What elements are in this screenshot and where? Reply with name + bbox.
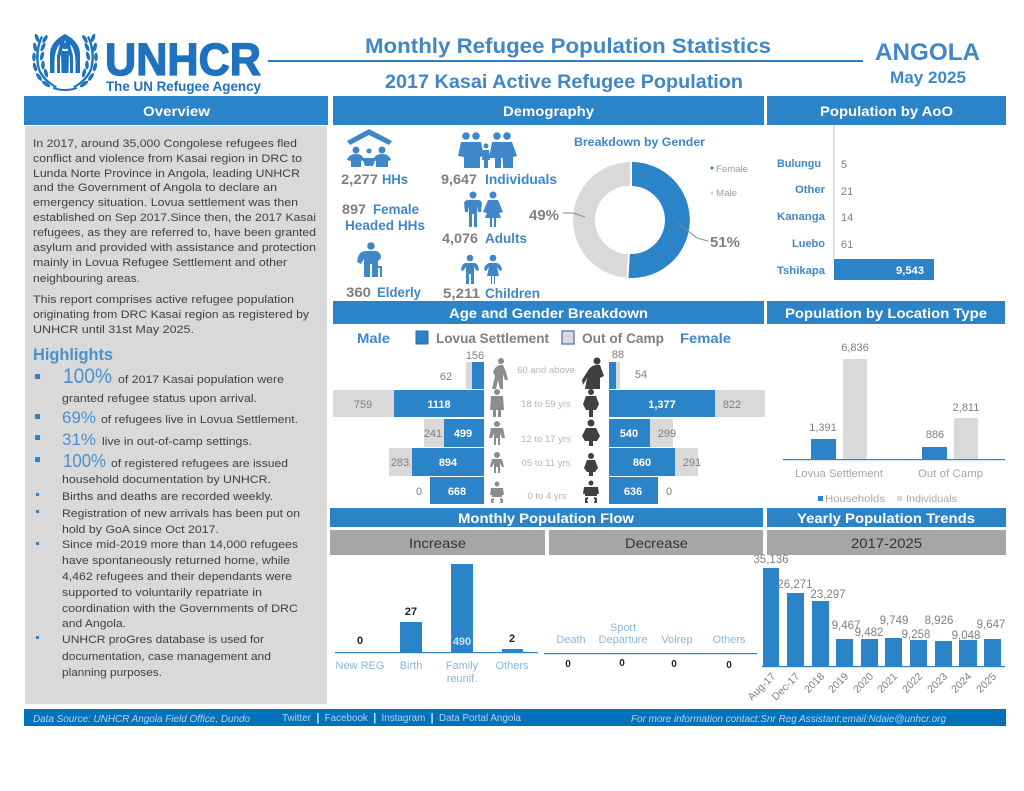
population pyramid: 12 to 17 yrs bbox=[521, 434, 571, 445]
report scope paragraph: UNHCR until 31st May 2025. bbox=[33, 324, 194, 336]
highlights list: supported to voluntarily repatriate in bbox=[62, 587, 262, 599]
elderly stat: 360 bbox=[346, 284, 371, 300]
panel: population by location type bbox=[767, 301, 1005, 505]
overview heading bbox=[24, 96, 328, 125]
subtitle: 2017 Kasai Active Refugee Population bbox=[385, 72, 743, 93]
AoO bar chart bbox=[777, 158, 934, 280]
population pyramid: 860 bbox=[633, 457, 651, 469]
donut segment: male bbox=[573, 162, 630, 278]
header bbox=[32, 33, 980, 94]
contact: For more information contact:Snr Reg Assistant;email:Ndaie@unhcr.org bbox=[631, 713, 946, 725]
yearly trends heading: Yearly Population Trends bbox=[797, 510, 975, 526]
location type bar chart: 1,391 bbox=[809, 422, 837, 434]
panel: demography bbox=[333, 96, 764, 301]
yearly bar chart bbox=[746, 554, 1005, 703]
panel: overview bbox=[24, 96, 328, 704]
female headed households stat: Headed HHs bbox=[345, 217, 425, 233]
icons: female age groups bbox=[582, 358, 604, 503]
population pyramid: 499 bbox=[454, 428, 472, 440]
location type bar chart: 6,836 bbox=[841, 342, 869, 354]
decrease bar chart: Death bbox=[556, 634, 586, 646]
children stat: Children bbox=[485, 285, 540, 301]
population pyramid: 156 bbox=[466, 350, 484, 362]
population pyramid: 62 bbox=[440, 371, 452, 383]
increase bar chart: 2 bbox=[509, 633, 515, 645]
population pyramid: 241 bbox=[424, 428, 442, 440]
yearly bar chart: 9,482 bbox=[855, 627, 883, 639]
age chart legend: Lovua Settlement bbox=[436, 330, 549, 346]
AoO bar chart: Bulungu bbox=[777, 158, 821, 170]
decrease bar chart: 0 bbox=[671, 659, 677, 670]
highlights list: 100% bbox=[63, 451, 106, 471]
AoO heading bbox=[767, 96, 1006, 125]
decrease sub-heading: Decrease bbox=[625, 535, 688, 551]
panel: population by AoO bbox=[767, 96, 1006, 280]
individuals stat: Individuals bbox=[485, 171, 557, 187]
icon: adults bbox=[464, 192, 503, 227]
social links: Twitter ❙ Facebook ❙ Instagram ❙ Data Portal Angola bbox=[282, 712, 521, 724]
increase bar chart: 27 bbox=[405, 606, 417, 618]
population pyramid: 18 to 59 yrs bbox=[521, 399, 571, 410]
households stat bbox=[341, 171, 408, 187]
highlights list: 4,462 refugees and their dependants were bbox=[62, 571, 292, 583]
highlights list: have spontaneously returned home, while bbox=[62, 555, 290, 567]
yearly bar chart: 9,647 bbox=[977, 619, 1005, 631]
increase sub-heading: Increase bbox=[409, 535, 466, 551]
yearly bar chart: 23,297 bbox=[810, 589, 846, 601]
highlights list: 31% bbox=[62, 430, 96, 449]
adults stat: Adults bbox=[485, 230, 527, 246]
yearly bar chart: Dec-17 bbox=[770, 671, 802, 703]
label: female share: 51% bbox=[710, 234, 740, 251]
AoO bar chart: 21 bbox=[841, 186, 853, 198]
population pyramid: 88 bbox=[612, 349, 624, 361]
highlights list: Since mid-2019 more than 14,000 refugees bbox=[62, 539, 299, 551]
AoO bar chart: Tshikapa bbox=[777, 265, 826, 277]
demography heading bbox=[333, 96, 764, 125]
population pyramid: 822 bbox=[723, 399, 741, 411]
yearly bar chart: 2023 bbox=[925, 671, 950, 696]
footer bbox=[24, 709, 1006, 726]
monthly flow heading bbox=[330, 508, 763, 527]
age and gender heading bbox=[333, 301, 764, 324]
overview paragraph: Lunda Norte Province in Angola, leading UNHCR bbox=[33, 168, 300, 180]
highlights list: 100% bbox=[63, 365, 112, 388]
increase bar chart: reunif. bbox=[447, 673, 477, 685]
population pyramid: 0 bbox=[416, 486, 422, 498]
age chart legend: Out of Camp bbox=[582, 330, 664, 346]
decrease bar chart: 0 bbox=[619, 658, 625, 669]
yearly bar chart: 9,048 bbox=[952, 630, 980, 642]
year range sub-heading: 2017-2025 bbox=[851, 535, 922, 551]
location chart legend bbox=[818, 493, 957, 505]
country: ANGOLA bbox=[875, 39, 980, 66]
yearly bar chart: 2021 bbox=[875, 671, 900, 696]
overview paragraph: asylum and provided with assistance and protection bbox=[33, 242, 316, 254]
location type bar chart: Lovua Settlement bbox=[795, 468, 883, 480]
AoO bar chart: 14 bbox=[841, 212, 853, 224]
population pyramid: 894 bbox=[439, 457, 458, 469]
logo wordmark: UNHCR bbox=[105, 34, 261, 85]
location chart legend: Households bbox=[825, 493, 885, 505]
increase sub-heading bbox=[330, 530, 545, 555]
panel: age and gender breakdown bbox=[333, 301, 765, 504]
elderly stat: Elderly bbox=[377, 284, 421, 300]
yearly bar chart: 9,749 bbox=[880, 615, 908, 627]
decrease bar chart: Sport bbox=[610, 622, 636, 634]
decrease sub-heading bbox=[549, 530, 763, 555]
AoO bar chart: 5 bbox=[841, 159, 847, 171]
population pyramid: 0 to 4 yrs bbox=[527, 491, 567, 502]
population pyramid: 1,377 bbox=[648, 399, 676, 411]
yearly bar chart: 8,926 bbox=[925, 615, 953, 627]
icon: family group bbox=[458, 132, 517, 168]
overview paragraph: established on Sep 2017.Since then, the 2017 Kasai bbox=[33, 212, 316, 224]
legend: male: Male bbox=[716, 188, 737, 199]
population pyramid: 1118 bbox=[427, 399, 451, 411]
legend: female: Female bbox=[716, 164, 748, 175]
increase bar chart: Family bbox=[446, 660, 479, 672]
households stat: 2,277 bbox=[341, 171, 378, 187]
children stat: 5,211 bbox=[443, 285, 480, 301]
overview paragraph: mainly in Lovua Refugee Settlement and other bbox=[33, 257, 287, 269]
population pyramid: 299 bbox=[658, 428, 676, 440]
population pyramid bbox=[333, 349, 765, 504]
decrease bar chart: Departure bbox=[599, 634, 647, 646]
report scope paragraph bbox=[33, 294, 310, 336]
location chart legend: Individuals bbox=[906, 493, 957, 505]
data source: Data Source: UNHCR Angola Field Office, Dundo bbox=[33, 713, 250, 725]
AoO bar chart: Kananga bbox=[777, 211, 826, 223]
yearly bar chart: 2022 bbox=[900, 671, 925, 696]
highlights list: and Angola. bbox=[62, 618, 126, 630]
donut chart title: Breakdown by Gender bbox=[574, 135, 705, 149]
yearly bar chart: 2020 bbox=[851, 671, 876, 696]
location type bar chart: 2,811 bbox=[953, 402, 979, 414]
label: female share bbox=[678, 223, 740, 251]
highlights list: UNHCR proGres database is used for bbox=[62, 634, 264, 646]
monthly flow heading: Monthly Population Flow bbox=[458, 510, 634, 526]
location type heading: Population by Location Type bbox=[785, 305, 987, 321]
population pyramid: 540 bbox=[620, 428, 638, 440]
label: male share: 49% bbox=[529, 207, 559, 224]
icon: children bbox=[461, 255, 502, 284]
demography heading: Demography bbox=[503, 103, 594, 119]
population pyramid: 60 and above bbox=[517, 365, 575, 376]
highlights list: Births and deaths are recorded weekly. bbox=[62, 491, 273, 503]
yearly bar chart: Aug-17 bbox=[746, 671, 778, 703]
highlights list: planning purposes. bbox=[62, 667, 162, 679]
icon: UNHCR emblem bbox=[32, 33, 98, 91]
female headed households stat bbox=[342, 201, 425, 233]
increase bar chart: 0 bbox=[357, 635, 363, 647]
icon: household shelter bbox=[347, 129, 392, 167]
highlights list: of refugees live in Lovua Settlement. bbox=[101, 414, 298, 426]
increase bar chart bbox=[335, 564, 538, 685]
highlights list: hold by GoA since Oct 2017. bbox=[62, 524, 219, 536]
location type bar chart bbox=[783, 342, 1005, 480]
highlights list: of registered refugees are issued bbox=[111, 458, 288, 470]
report scope paragraph: originating from DRC Kasai region as registered by bbox=[33, 309, 310, 321]
yearly trends heading bbox=[767, 508, 1006, 527]
yearly bar chart: 2024 bbox=[949, 671, 974, 696]
population pyramid: 05 to 11 yrs bbox=[522, 458, 571, 469]
increase bar chart: New REG bbox=[336, 660, 384, 672]
population pyramid: 283 bbox=[391, 457, 409, 469]
increase bar chart: Others bbox=[495, 660, 529, 672]
population pyramid: 759 bbox=[354, 399, 372, 411]
population pyramid: 636 bbox=[624, 486, 642, 498]
yearly bar chart: 26,271 bbox=[777, 579, 813, 591]
population pyramid: 54 bbox=[635, 369, 647, 381]
overview paragraph: In 2017, around 35,000 Congolese refugees fled bbox=[33, 138, 297, 150]
location type heading bbox=[767, 301, 1005, 324]
AoO heading: Population by AoO bbox=[820, 103, 953, 119]
population pyramid: 0 bbox=[666, 486, 672, 498]
yearly bar chart: 35,136 bbox=[753, 554, 789, 566]
age chart legend: Female bbox=[680, 330, 731, 346]
age and gender heading: Age and Gender Breakdown bbox=[449, 305, 648, 321]
yearly bar chart: 2019 bbox=[826, 671, 851, 696]
decrease bar chart: Volrep bbox=[661, 634, 693, 646]
main title: Monthly Refugee Population Statistics bbox=[365, 35, 771, 58]
icon: elderly person bbox=[357, 242, 382, 277]
children stat bbox=[443, 285, 540, 301]
donut segment: female bbox=[628, 162, 690, 278]
highlights list: granted refugee status upon arrival. bbox=[62, 393, 257, 405]
date: May 2025 bbox=[890, 68, 966, 87]
AoO bar chart: Luebo bbox=[792, 238, 825, 250]
AoO axis bbox=[833, 125, 834, 259]
highlights list: coordination with the Governments of DRC bbox=[62, 603, 298, 615]
location type bar chart: 886 bbox=[926, 429, 944, 441]
yearly bar chart: 2025 bbox=[974, 671, 999, 696]
decrease bar chart bbox=[544, 622, 757, 671]
highlights list: documentation, case management and bbox=[62, 651, 271, 663]
highlights list: household documentation by UNHCR. bbox=[62, 474, 271, 486]
location type bar chart: Out of Camp bbox=[918, 468, 983, 480]
decrease bar chart: 0 bbox=[726, 660, 732, 671]
highlights list bbox=[35, 365, 300, 679]
age chart legend: Male bbox=[357, 330, 390, 346]
overview paragraph: refugees, as they are referred to, have been granted bbox=[33, 227, 316, 239]
female headed households stat: 897 bbox=[342, 201, 366, 217]
decrease bar chart: 0 bbox=[565, 659, 571, 670]
adults stat bbox=[442, 230, 527, 246]
AoO bar chart: Other bbox=[795, 184, 826, 196]
title rule bbox=[268, 60, 863, 62]
icons: male age groups bbox=[489, 358, 508, 503]
increase bar chart: Birth bbox=[400, 660, 422, 672]
population pyramid: 291 bbox=[683, 457, 701, 469]
AoO bar chart: 61 bbox=[841, 239, 853, 251]
overview heading: Overview bbox=[143, 103, 210, 119]
panel: yearly population trends bbox=[746, 508, 1006, 703]
population pyramid: 668 bbox=[448, 486, 466, 498]
age chart legend bbox=[357, 330, 731, 346]
individuals stat: 9,647 bbox=[441, 171, 477, 187]
highlights list: 69% bbox=[62, 408, 96, 427]
yearly bar chart: 2018 bbox=[802, 671, 827, 696]
yearly bar chart: 9,467 bbox=[832, 620, 860, 632]
highlights list: Registration of new arrivals has been put on bbox=[62, 508, 300, 520]
highlights list: of 2017 Kasai population were bbox=[118, 374, 284, 386]
overview background bbox=[25, 126, 327, 704]
female headed households stat: Female bbox=[373, 201, 419, 217]
AoO bar chart: 9,543 bbox=[896, 265, 924, 277]
decrease bar chart: Others bbox=[712, 634, 746, 646]
overview paragraph: emergency situation. Lovua settlement was then bbox=[33, 197, 298, 209]
year range sub-heading bbox=[767, 530, 1006, 555]
individuals stat bbox=[441, 171, 557, 187]
overview paragraph: neighbouring areas. bbox=[33, 273, 140, 285]
highlights heading: Highlights bbox=[33, 345, 113, 364]
overview paragraph bbox=[33, 138, 316, 285]
elderly stat bbox=[346, 284, 421, 300]
donut chart: breakdown by gender bbox=[529, 135, 748, 278]
increase bar chart: 490 bbox=[453, 636, 471, 648]
label: male share bbox=[529, 207, 585, 224]
report scope paragraph: This report comprises active refugee population bbox=[33, 294, 294, 306]
adults stat: 4,076 bbox=[442, 230, 478, 246]
overview paragraph: conflict and violence from Kasai region in DRC to bbox=[33, 153, 302, 165]
yearly bar chart: 9,258 bbox=[902, 629, 930, 641]
overview paragraph: and the Government of Angola to declare an bbox=[33, 182, 277, 194]
highlights list: live in out-of-camp settings. bbox=[102, 436, 252, 448]
panel: monthly population flow bbox=[330, 508, 763, 685]
households stat: HHs bbox=[382, 171, 408, 187]
logo tagline: The UN Refugee Agency bbox=[106, 78, 261, 94]
